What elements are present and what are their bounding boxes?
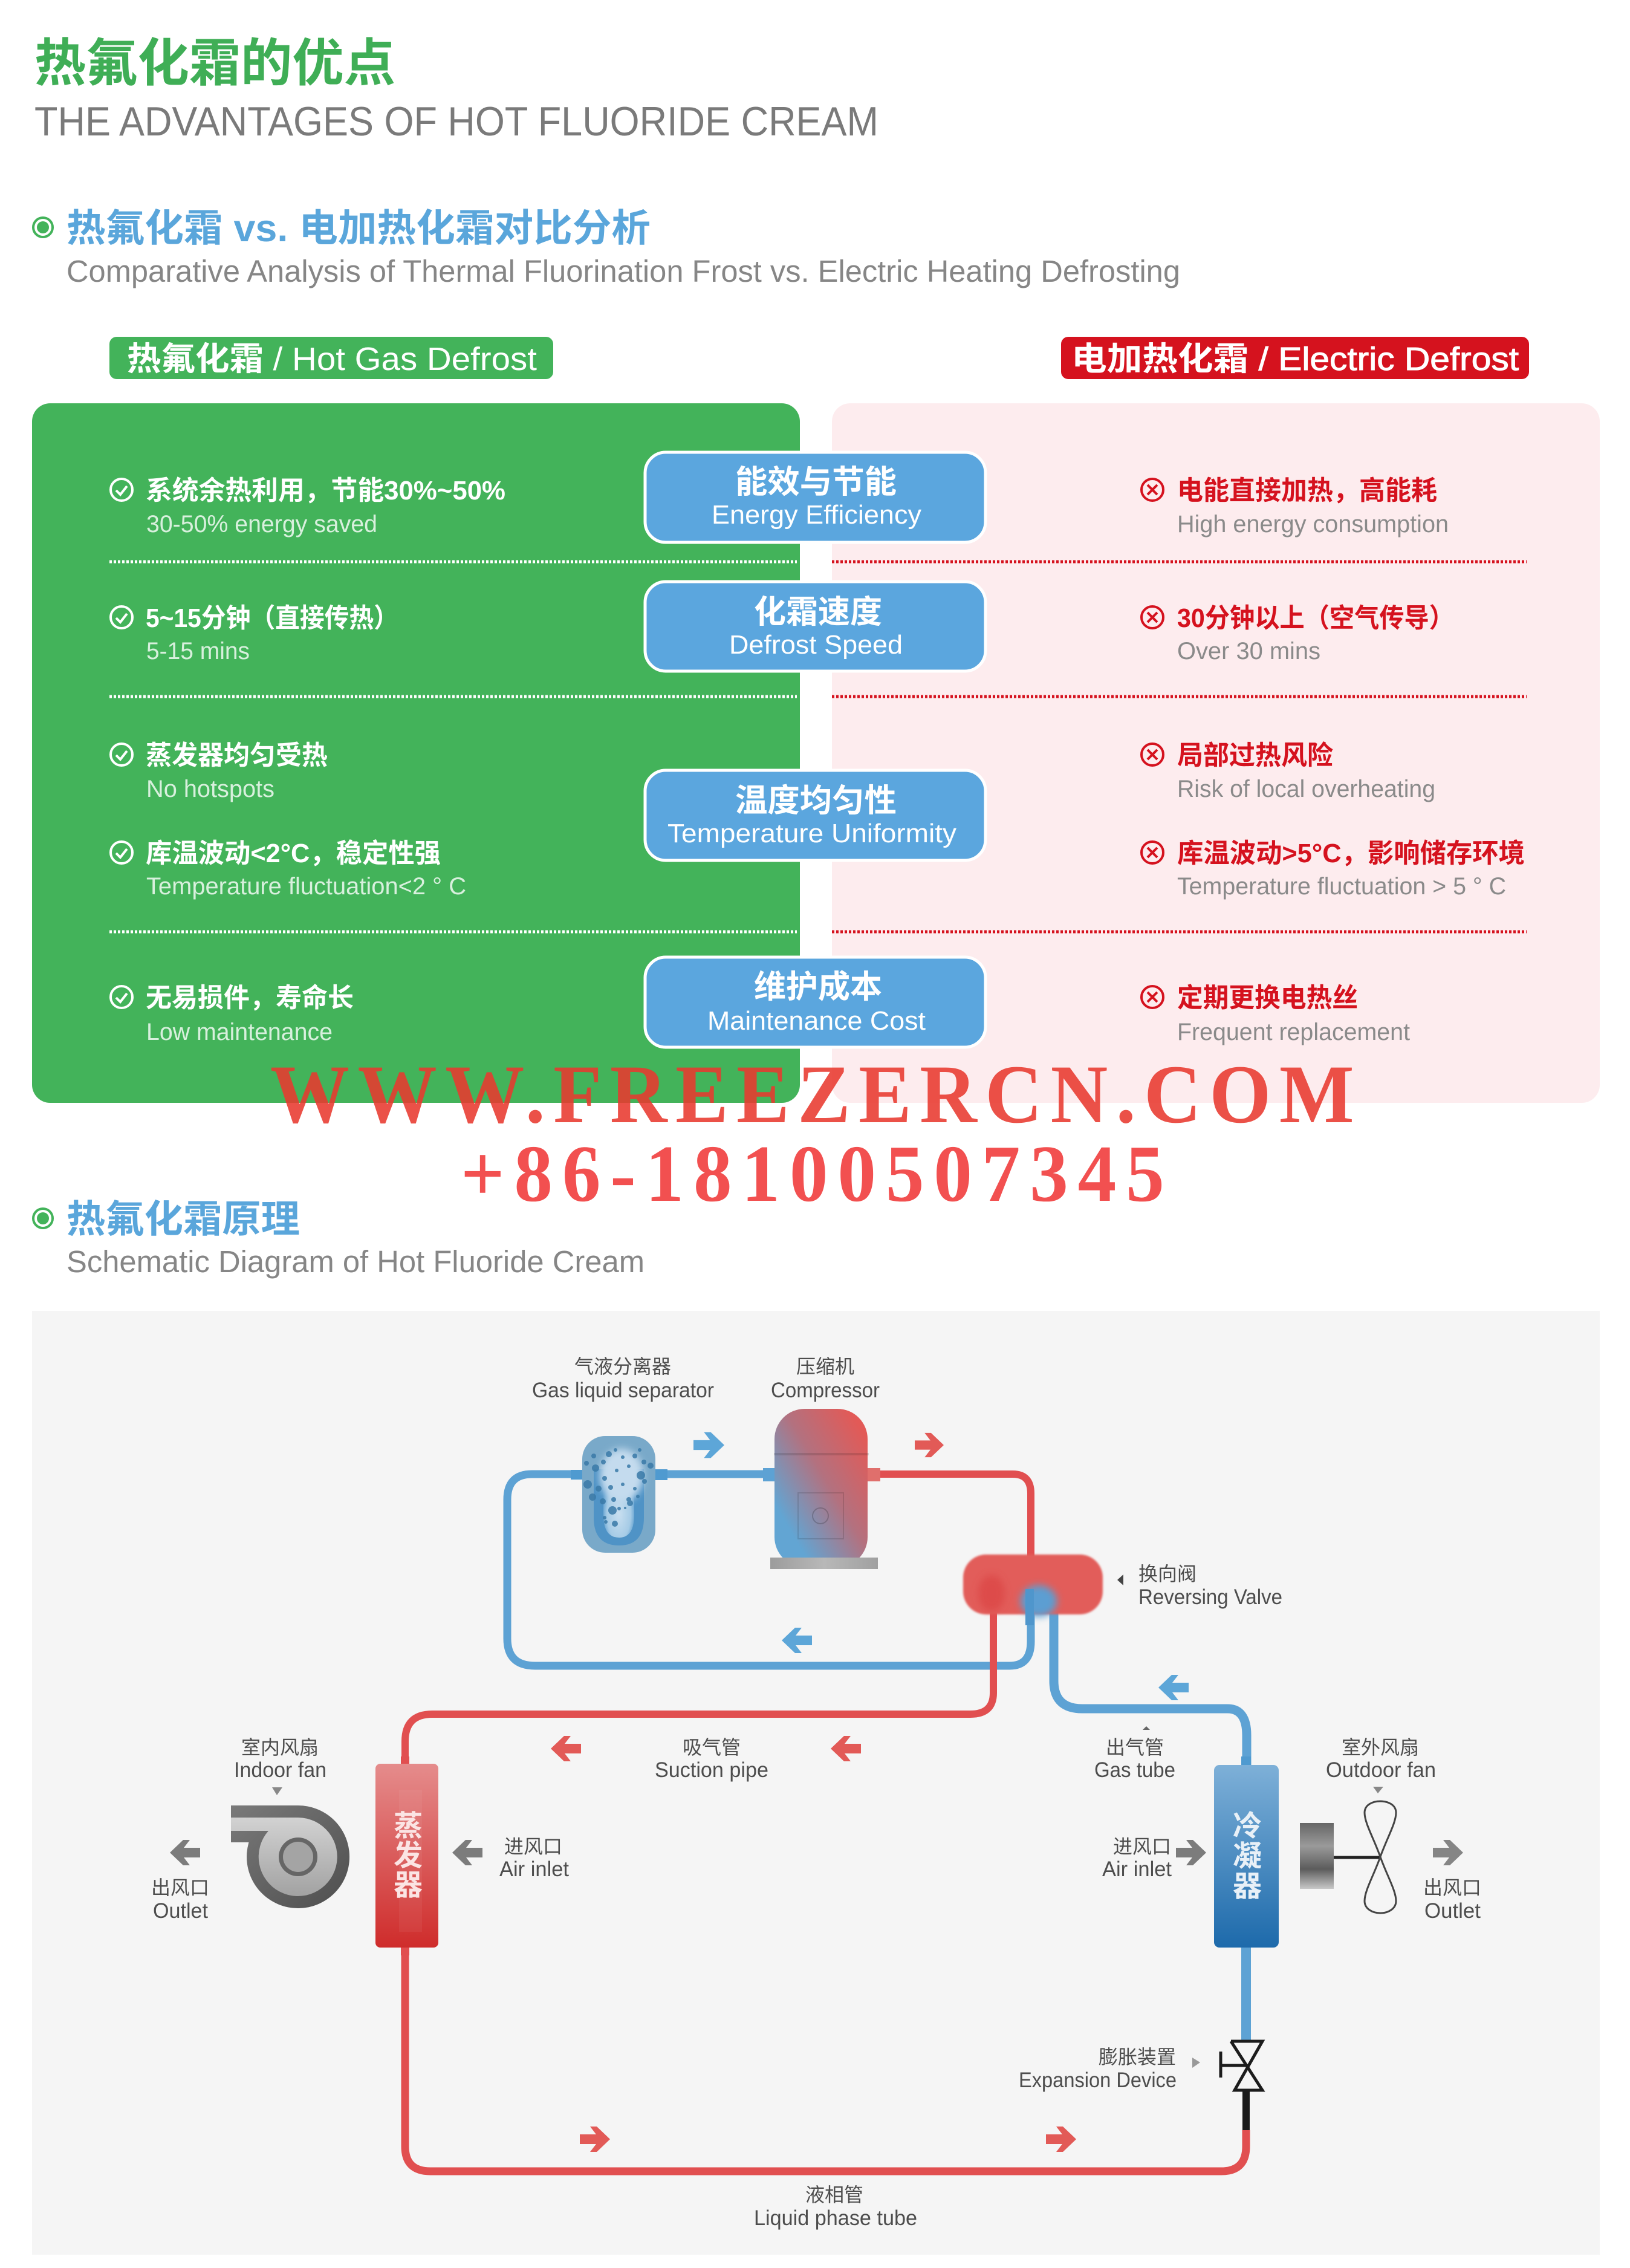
category button: maintenance cost: Maintenance Cost: [707, 1006, 926, 1036]
label: liquid phase tube: 液相管: [805, 2184, 863, 2206]
row: speed: [1141, 603, 1454, 664]
arrow: gas tube left: [1158, 1675, 1189, 1700]
section heading: schematic: Schematic Diagram of Hot Fluoride Cream: [67, 1244, 645, 1279]
category button: maintenance cost: [645, 957, 985, 1047]
category button: temperature uniformity: 温度均匀性: [735, 783, 897, 819]
pipe: liquid line: [405, 1947, 1246, 2171]
row: temperature: Temperature fluctuation<2 ° C: [146, 873, 466, 900]
label: indoor fan: 室内风扇: [241, 1737, 319, 1758]
label: indoor fan: Indoor fan: [234, 1758, 326, 1782]
label: condenser air inlet: Air inlet: [1102, 1857, 1172, 1881]
label: reversing valve: [1117, 1563, 1282, 1609]
label: indoor outlet: Outlet: [153, 1899, 208, 1923]
category button: temperature uniformity: [645, 770, 985, 860]
row: replacement: [1141, 983, 1410, 1045]
label: reversing valve: 换向阀: [1138, 1563, 1197, 1585]
label: outdoor outlet: 出风口: [1423, 1877, 1481, 1899]
label: gas liquid separator: Gas liquid separator: [532, 1379, 714, 1402]
icon: outdoor fan: [1300, 1801, 1396, 1913]
pipe: blue low-pressure loop: [507, 1474, 1031, 1666]
label: evaporator air inlet: [499, 1836, 569, 1881]
icon: evaporator: 蒸: [394, 1810, 423, 1842]
label: evaporator air inlet: 进风口: [504, 1836, 562, 1857]
row: maintenance: 无易损件，寿命长: [146, 983, 354, 1013]
label: outdoor fan: [1326, 1737, 1436, 1793]
label: expansion device: [1019, 2046, 1200, 2092]
row: maintenance: [111, 983, 354, 1045]
title: THE ADVANTAGES OF HOT FLUORIDE CREAM: [34, 99, 878, 145]
category button: energy efficiency: Energy Efficiency: [712, 500, 921, 530]
label: suction pipe: 吸气管: [683, 1737, 741, 1758]
arrow: condenser air inlet: [1176, 1840, 1206, 1865]
row: speed: Over 30 mins: [1177, 638, 1320, 664]
label: suction pipe: [655, 1737, 768, 1782]
category button: defrost speed: 化霜速度: [754, 594, 882, 630]
section heading: comparison: Comparative Analysis of Thermal Fluorination Frost vs. Electric Heating Defrosting: [67, 254, 1180, 288]
icon: condenser: 器: [1233, 1871, 1262, 1903]
label: outdoor fan: Outdoor fan: [1326, 1758, 1436, 1782]
label: indoor outlet: 出风口: [151, 1877, 209, 1899]
label: gas liquid separator: 气液分离器: [574, 1356, 671, 1377]
row: temperature: 库温波动<2°C，稳定性强: [146, 839, 441, 868]
arrow: separator to compressor: [693, 1432, 724, 1458]
row: no hotspots: No hotspots: [146, 776, 274, 802]
arrow: liquid right 2: [1046, 2127, 1076, 2152]
label: reversing valve: Reversing Valve: [1138, 1585, 1282, 1609]
row: overheating: Risk of local overheating: [1177, 776, 1435, 802]
row: temperature: 库温波动>5°C，影响储存环境: [1177, 839, 1525, 868]
row: speed: 30分钟以上（空气传导）: [1177, 603, 1454, 633]
section heading: schematic: [33, 1198, 645, 1279]
icon: compressor: [763, 1409, 880, 1569]
row: speed: [111, 603, 398, 664]
label: outdoor fan: 室外风扇: [1342, 1737, 1419, 1758]
label: condenser air inlet: [1102, 1836, 1172, 1881]
row: energy: 电能直接加热，高能耗: [1177, 476, 1437, 505]
icon: evaporator: 器: [394, 1870, 423, 1902]
icon: evaporator: 发: [394, 1840, 423, 1872]
label: indoor fan: [234, 1737, 326, 1795]
arrow: suction left 2: [831, 1736, 861, 1761]
pipe: condenser to expansion: [1241, 1948, 1251, 2041]
row: energy: 30-50% energy saved: [146, 511, 377, 538]
label: gas liquid separator: [532, 1356, 714, 1402]
pill: hot gas defrost: 热氟化霜 / Hot Gas Defrost: [127, 341, 537, 377]
arrow: liquid right 1: [580, 2127, 610, 2152]
label: outdoor outlet: Outlet: [1424, 1899, 1481, 1923]
row: temperature: Temperature fluctuation > 5 ° C: [1177, 873, 1506, 900]
label: condenser air inlet: 进风口: [1113, 1836, 1171, 1857]
arrow: compressor discharge: [915, 1433, 944, 1457]
category button: defrost speed: [645, 582, 985, 671]
row: maintenance: Low maintenance: [146, 1019, 333, 1045]
row: no hotspots: [111, 741, 328, 802]
category button: energy efficiency: [645, 452, 985, 542]
row: energy: 系统余热利用，节能30%~50%: [146, 476, 505, 505]
watermark: phone: +86-18100507345: [461, 1129, 1164, 1219]
icon: gas liquid separator: [571, 1436, 667, 1553]
arrow: evaporator air inlet: [452, 1840, 482, 1865]
label: liquid phase tube: Liquid phase tube: [754, 2206, 917, 2230]
watermark: website: WWW.FREEZERCN.COM: [270, 1048, 1354, 1141]
icon: expansion device: [1221, 2041, 1262, 2090]
section heading: comparison: 热氟化霜 vs. 电加热化霜对比分析: [67, 207, 651, 250]
category button: maintenance cost: 维护成本: [754, 969, 882, 1005]
label: compressor: 压缩机: [796, 1356, 854, 1377]
label: compressor: [771, 1356, 880, 1402]
title: [34, 35, 878, 145]
row: speed: 5~15分钟（直接传热）: [146, 603, 398, 633]
panel: hot gas defrost: [32, 403, 800, 1103]
row: speed: 5-15 mins: [146, 638, 250, 664]
icon: condenser: 冷: [1233, 1810, 1262, 1842]
label: outdoor outlet: [1423, 1877, 1481, 1923]
arrow: return left: [782, 1628, 812, 1653]
pipe: red suction: [405, 1608, 993, 1766]
label: gas tube: [1094, 1726, 1175, 1782]
label: expansion device: Expansion Device: [1019, 2068, 1177, 2092]
label: indoor outlet: [151, 1877, 209, 1923]
category button: temperature uniformity: Temperature Uniformity: [667, 819, 956, 848]
row: replacement: Frequent replacement: [1177, 1019, 1410, 1045]
title: 热氟化霜的优点: [34, 35, 395, 93]
row: no hotspots: 蒸发器均匀受热: [146, 741, 328, 770]
label: compressor: Compressor: [771, 1379, 880, 1402]
label: suction pipe: Suction pipe: [655, 1758, 768, 1782]
row: energy: [1141, 476, 1449, 538]
icon: condenser: [1214, 1756, 1279, 1948]
arrow: suction left 1: [551, 1736, 581, 1761]
row: overheating: [1141, 741, 1435, 802]
schematic diagram panel: [32, 1311, 1600, 2255]
pipe: blue gas tube: [1054, 1584, 1247, 1766]
row: temperature: [1141, 839, 1525, 900]
pipe: red discharge: [869, 1474, 1031, 1560]
label: gas tube: Gas tube: [1094, 1758, 1175, 1782]
pill: electric defrost: 电加热化霜 / Electric Defrost: [1071, 341, 1519, 377]
arrow: indoor outlet: [170, 1840, 200, 1865]
category button: defrost speed: Defrost Speed: [729, 630, 903, 660]
arrow: outdoor outlet: [1433, 1840, 1463, 1865]
label: gas tube: 出气管: [1106, 1737, 1164, 1758]
icon: indoor fan: [231, 1805, 349, 1908]
icon: reversing valve: [963, 1555, 1103, 1625]
panel: electric defrost: [832, 403, 1600, 1103]
row: energy: High energy consumption: [1177, 511, 1449, 538]
icon: evaporator: [375, 1756, 438, 1955]
row: energy: [111, 476, 505, 538]
row: replacement: 定期更换电热丝: [1177, 983, 1358, 1013]
row: temperature: [111, 839, 466, 900]
category button: energy efficiency: 能效与节能: [735, 464, 897, 500]
icon: condenser: 凝: [1233, 1841, 1262, 1873]
label: liquid phase tube: [754, 2184, 917, 2230]
label: expansion device: 膨胀装置: [1099, 2046, 1176, 2068]
label: evaporator air inlet: Air inlet: [499, 1857, 569, 1881]
row: overheating: 局部过热风险: [1177, 741, 1333, 770]
section heading: schematic: 热氟化霜原理: [67, 1198, 300, 1241]
section heading: comparison: [33, 207, 1180, 288]
